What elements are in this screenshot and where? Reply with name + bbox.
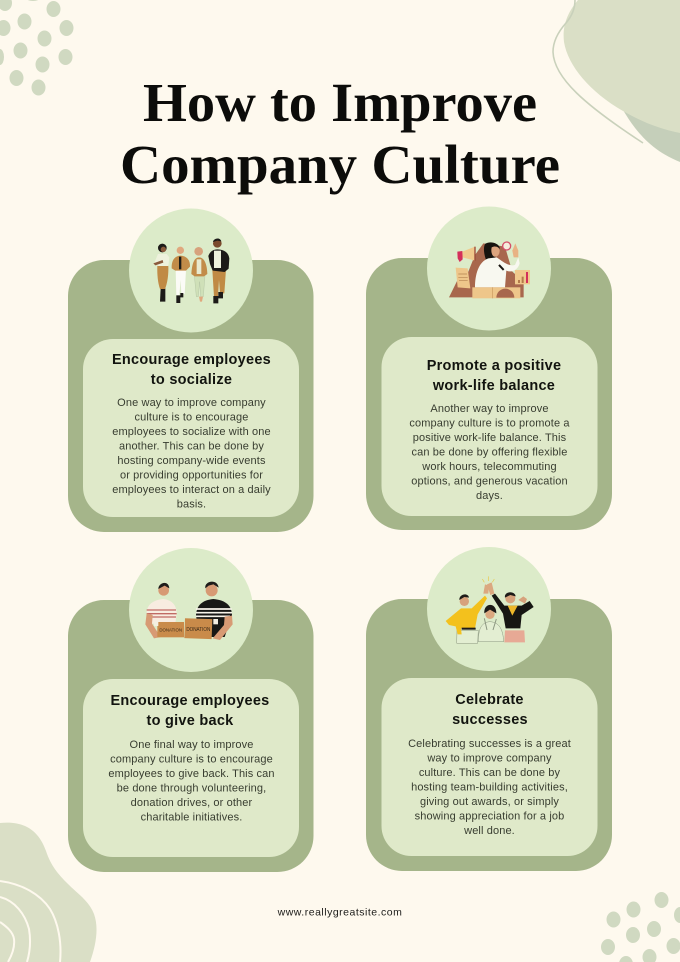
heading [110,693,270,729]
body text: basis. [177,498,206,510]
icon circle: team high five [427,547,551,671]
heading: Encourage employees [112,352,271,368]
body text: well done. [463,825,515,837]
body text: culture is to encourage [134,412,249,424]
body text: employees to give back. This can [108,768,275,780]
title: How to Improve [143,72,537,133]
body text: One final way to improve [130,739,253,751]
body text: showing appreciation for a job [415,810,564,822]
body text: company culture is to promote a [409,418,570,430]
body text: days. [476,490,503,502]
icon circle: two men holding donation boxes [129,548,253,672]
body text [408,738,571,837]
heading [427,358,561,394]
panel: celebrate successes [366,547,612,871]
dots: bottom right [601,892,680,962]
body text [112,397,271,510]
icon circle: two men holding donation boxes: DONATION [186,627,210,633]
body text: One way to improve company [117,397,266,409]
body text: can be done by offering flexible [412,446,567,458]
body text: hosting company-wide events [117,455,266,467]
heading [112,352,271,388]
panel: encourage employees to socialize [68,208,314,532]
body text: work hours, telecommuting [421,461,557,473]
footer website: www.reallygreatsite.com [277,906,402,918]
dots: top left [0,0,74,96]
body text [108,739,275,824]
title: Company Culture [120,134,560,195]
body text: hosting team-building activities, [411,782,568,794]
body text: giving out awards, or simply [420,796,559,808]
heading: Promote a positive [427,358,561,374]
body text: employees to interact on a daily [112,484,271,496]
heading: to give back [146,713,234,729]
body text: another. This can be done by [119,440,264,452]
body text: or providing opportunities for [120,470,263,482]
body text: charitable initiatives. [141,812,242,824]
panel: encourage employees to give back [68,548,314,872]
body text: employees to socialize with one [112,426,271,438]
heading: work-life balance [432,378,555,394]
body text: company culture is to encourage [110,754,273,766]
body text: be done through volunteering, [117,782,266,794]
body text: positive work-life balance. This [413,432,567,444]
body text: culture. This can be done by [419,767,561,779]
body text: way to improve company [426,752,552,764]
heading: Celebrate [455,692,524,708]
heading: to socialize [151,372,232,388]
heading [452,692,528,728]
icon circle: two men holding donation boxes: DONATION [159,628,182,634]
body text: donation drives, or other [131,797,253,809]
blob: top right corner [553,0,680,162]
body text: Another way to improve [430,403,549,415]
panel: promote a positive work-life balance [366,206,612,530]
heading: Encourage employees [110,693,270,709]
body text: options, and generous vacation [411,476,568,488]
heading: successes [452,712,528,728]
title [120,72,560,195]
body text [409,403,570,502]
blob: bottom left with rings [0,823,97,962]
icon circle: group of coworkers walking [129,208,253,332]
body text: Celebrating successes is a great [408,738,571,750]
icon circle: woman at desk with megaphone and chart [427,206,551,330]
